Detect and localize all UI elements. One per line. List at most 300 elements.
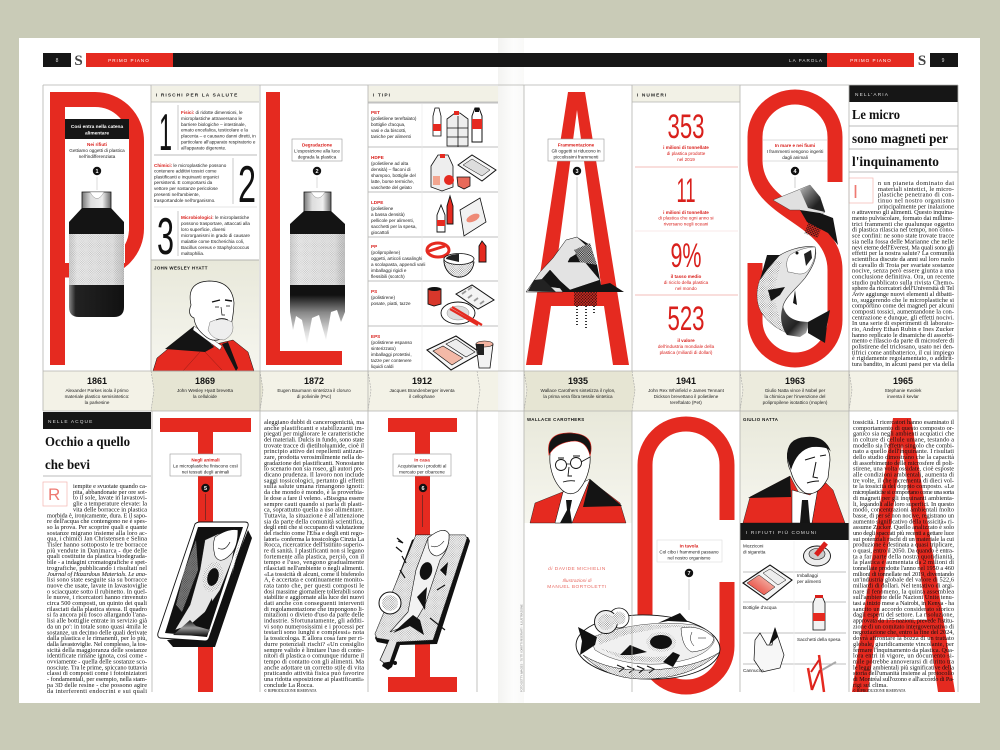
- step number 4: 4: [793, 169, 797, 175]
- article: second column: Rocca, ricercatrice dell'Istituto superio-: [264, 542, 364, 549]
- caption: degradation: L'esposizione alla luce: [294, 148, 340, 154]
- letter A with fragments: [526, 92, 629, 365]
- article: last column: globale, giuridicamente vincolante, per: [853, 641, 955, 648]
- article: last column: © RIPRODUZIONE RISERVATA: [853, 688, 906, 693]
- article: second column: sia da parte della comunità scientifica,: [264, 518, 364, 525]
- article: last column: ta a far parte della nostra quotidianità,: [853, 553, 954, 560]
- article: second column: sulla salute umana rimangono ignoti:: [264, 483, 364, 490]
- type: PET: vasi e da biscotti,: [371, 128, 406, 133]
- stat 9%: nel mondo: [675, 286, 697, 291]
- body text: quali costituite da plastica biodegrada-: [47, 553, 147, 560]
- straws: Cannucce: [743, 668, 764, 673]
- caption: sea and rivers: dagli animali: [782, 155, 808, 160]
- article: last column: te la tossicità del doppio composto. «Le: [853, 483, 954, 490]
- article: second column: anche adottare un corretto stile di vita: [264, 664, 364, 671]
- cigarette butts: [743, 543, 830, 566]
- risk 2: plastificanti e inquinanti organici: [154, 174, 219, 180]
- body text: pa 3D delle resine - che possono agire: [47, 682, 147, 689]
- body text: è rigidamente regolamentato, o addirit-: [852, 355, 954, 362]
- risk 3: Microbiologici: le microplastiche: [181, 215, 250, 220]
- 1963: la chimica per l'invenzione del: [765, 394, 825, 399]
- body text: effetti per la nostra salute? La comunità: [852, 250, 954, 257]
- article: last column: o quasi, entro il 2050. Da quando è entra-: [853, 548, 954, 554]
- article: last column: produzione è destinata a quasi triplicare,: [853, 542, 954, 549]
- step number 2: 2: [315, 169, 319, 175]
- article: second column: industrie. Sfortunatamente, gli additi-: [264, 618, 364, 625]
- body text: re dell'acqua che contengono ne è spes-: [47, 518, 147, 525]
- article: last column: sui potenziali rischi di un materiale la cui: [853, 536, 954, 543]
- body text: rilasciati dalla plastica stessa. Il quadro: [47, 606, 147, 613]
- article: last column: zione di un comitato intergovernativo di: [853, 623, 954, 630]
- type: LDPE: pellicole per alimenti,: [371, 218, 414, 223]
- portrait: John Wesley Hyatt: [151, 260, 259, 371]
- caption: at table: Col cibo i frammenti passano: [659, 550, 719, 554]
- body text: lisi sono state eseguite sia su borracce: [47, 577, 147, 584]
- article: last column: rigi sul clima.: [853, 682, 888, 689]
- article: second column: del rischio come l'Efsa e degli enti rego-: [264, 530, 364, 537]
- type: PP: PP: [371, 244, 377, 249]
- header bar: 9: [942, 58, 945, 64]
- body text: polistirene del triclosano, usato nei den-: [852, 344, 954, 350]
- body text: si fa ancora più fosco allargando l'ana-: [47, 612, 147, 619]
- panel: numbers: I NUMERI: [637, 92, 667, 98]
- 1935: la prima vera fibra tessile sintetica: [543, 394, 613, 399]
- type: LDPE: giocattoli: [371, 230, 389, 235]
- 1872: [277, 376, 351, 399]
- 1861: Alexander Parkes isola il primo: [65, 388, 129, 393]
- 1869: la celluloide: [193, 394, 217, 399]
- article: second column: mitazioni o divieto d'uso da parte delle: [264, 612, 364, 619]
- 1861: la parkesine: [85, 400, 110, 405]
- stat 353: i milioni di tonnellate: [663, 145, 709, 150]
- article: last column: tre volte, il che incrementa di dieci vol-: [853, 477, 954, 484]
- 1869: 1869: [195, 376, 215, 386]
- article: last column: uno degli spaccati più recenti a gettare luce: [853, 530, 954, 537]
- stat 353: 353: [668, 108, 704, 146]
- risk 1: all'apparato digerente.: [181, 146, 226, 150]
- article: second column: piegati per migliorare le caratteristiche: [264, 431, 364, 438]
- article: last column: mile potrebbe annoverarsi di diritto tra: [853, 658, 954, 665]
- article: second column: gradazione dei plastificanti. Nonostante: [264, 460, 364, 467]
- article: last column: microplastiche si comportano come una sorta: [853, 489, 954, 496]
- body text: Tisler hanno sottoposto le tre borracce: [47, 542, 147, 548]
- article: last column: assume Zucker. Quello analizzato è solo: [853, 524, 954, 531]
- risk 3: [157, 208, 250, 266]
- headline: sono magneti per: [852, 132, 948, 147]
- stat 523: plastica (miliardi di dollari): [660, 350, 713, 355]
- icon: fish on plate: [575, 608, 721, 681]
- article: second column: tempo di contatto con gli alimenti. Ma: [264, 658, 364, 665]
- 1872: Eugen Baumann sintetizza il cloruro: [277, 388, 351, 393]
- caption: at table: nel nostro organismo: [668, 556, 711, 560]
- article: last column: alle condizioni ambientali, aumenta di: [853, 472, 954, 479]
- headline: che bevi: [45, 458, 90, 473]
- article: last column: stirene, una volta ossidate, cioè esposte: [853, 466, 954, 473]
- article: last column: comportamento di questo composto or-: [853, 425, 954, 432]
- type: PS: posate, piatti, tazze: [371, 301, 411, 306]
- type: EPS: sinterizzato): [371, 346, 396, 351]
- article: last column: tonnellate prodotte l'anno nel 1950 a 460: [853, 565, 954, 572]
- icon: plastic fragment: [526, 237, 624, 328]
- type: EPS: (polistirene espanso: [371, 340, 413, 345]
- article: second column: re di sanità. I plastificanti non si legano: [264, 548, 364, 554]
- timeline band: [43, 371, 958, 411]
- page gutter: [498, 38, 524, 703]
- cigarette butts: di sigaretta: [743, 550, 766, 554]
- 1965: inventa il kevlar: [887, 394, 919, 399]
- section tag: [43, 412, 151, 429]
- caption: degradation: [292, 139, 342, 161]
- body text: o sciacquate sotto il rubinetto. In quel-: [47, 588, 147, 595]
- caption: food chain: Così entra nella catena: [71, 124, 123, 130]
- 1935: 1935: [568, 376, 588, 386]
- byline: di DAVIDE MICHIELIN: [548, 566, 606, 572]
- body text: o attraverso gli alimenti. Questo inquina-: [852, 209, 954, 216]
- body text: dalla plastica e le rimanenti, per lo più,: [47, 635, 147, 642]
- section tag: NELLE ACQUE: [48, 419, 93, 425]
- article: second column: vi sono numerosissimi e i processi per: [264, 623, 365, 630]
- article: last column: aumento significativo della tossicità» ri-: [853, 518, 954, 525]
- body text: circa 500 composti, un quinto dei quali: [47, 600, 147, 607]
- body text: di cavallo di Troia per svariate sostanze: [852, 262, 954, 269]
- body text: composti tossici, aumentandone la con-: [852, 308, 954, 316]
- article: second column: nitori di plastica o comunque ridurne il: [264, 653, 364, 660]
- article: last column: un'industria globale del valore di 522,6: [853, 577, 954, 584]
- body text: hanno replicato le dinamiche di assorbi-: [852, 332, 954, 339]
- headline: [43, 435, 151, 476]
- stat 9%: 9%: [670, 237, 702, 275]
- type: HDPE: [371, 154, 496, 191]
- body text: mento e rilascio da parte di microsfere di: [852, 338, 954, 345]
- caption: in animals: nei tessuti degli animali: [182, 470, 229, 474]
- portrait: John Wesley Hyatt: JOHN WESLEY HYATT: [154, 266, 208, 270]
- panel: most common waste: I RIFIUTI PIÙ COMUNI: [746, 529, 818, 536]
- body text: classi di composti come i fotoiniziatori: [47, 670, 147, 677]
- body text: pita, abbandonate per ore sot-: [73, 489, 147, 496]
- type: PP: [371, 241, 486, 279]
- article: second column: una ridotta esposizione ai plastificanti»: [264, 676, 364, 683]
- header bar: PRIMO PIANO: [850, 58, 892, 63]
- drop cap: R: [48, 485, 60, 504]
- panel: plastic types: I TIPI: [373, 92, 391, 98]
- icon: fish: [757, 247, 830, 343]
- article: last column: dagli esperti del settore. La risoluzione,: [853, 612, 954, 619]
- body text: nuove che usate, lavate in lavastoviglie: [47, 582, 147, 590]
- column rules: [43, 85, 958, 692]
- body text: più vendute in Danimarca - due delle: [47, 547, 147, 554]
- article: Le micro: [849, 85, 958, 368]
- article: second column: la tossicologa. E allora cosa fare per ri-: [264, 635, 364, 642]
- body text: da un po': in totale sono quasi 4mila le: [47, 623, 147, 630]
- article: last column: li, legandoli alle loro superfici. In questo: [853, 501, 954, 508]
- header bar: PRIMO PIANO: [108, 58, 150, 63]
- body text: studio pubblicato sulla rivista Chemo-: [852, 279, 954, 286]
- stat 11: i milioni di tonnellate: [663, 210, 709, 215]
- letter L with decaying bottle: [266, 92, 345, 365]
- caption: fragmentation: [548, 139, 604, 161]
- step number 2: [313, 167, 321, 175]
- caption: sea and rivers: I frammenti vengono ingeriti: [767, 149, 823, 154]
- letter P with bottle: [50, 92, 137, 365]
- article: last column: negoziazione che, entro la fine del 2024,: [853, 629, 954, 636]
- caption: in animals: Le microplastiche finiscono così: [173, 464, 238, 468]
- step number 4: [791, 167, 799, 175]
- risk 2: Chimici: le microplastiche possono: [154, 163, 227, 168]
- step number 6: 6: [421, 486, 425, 492]
- food packaging: [743, 565, 821, 600]
- header bar: 8: [56, 58, 59, 64]
- type: HDPE: shampoo, bottiglie del: [371, 173, 416, 178]
- step number 5: [201, 484, 210, 492]
- article: last column: lora entri in vigore, un documento si-: [853, 653, 954, 660]
- panel: plastic types: [368, 86, 498, 370]
- stat 353: nel 2019: [677, 157, 695, 162]
- type: LDPE: LDPE: [371, 200, 383, 205]
- drop cap: I: [853, 182, 858, 202]
- body text: dalla lavastoviglie. Nel complesso, la tos-: [47, 641, 147, 648]
- 1912: [389, 376, 455, 399]
- byline: Illustrazioni di: [562, 578, 592, 584]
- stat 523: il valore: [677, 338, 695, 343]
- article: last column: tasi a inizio mese a Nairobi, in Kenya - ha: [853, 600, 954, 607]
- type: HDPE: HDPE: [371, 155, 384, 160]
- 1963: polipropilene isotattico (moplen): [763, 400, 828, 405]
- body text: tifrici come antibatterico, il cui impiego: [852, 349, 954, 356]
- food packaging: per alimenti: [797, 579, 821, 584]
- step number 5: 5: [204, 486, 207, 492]
- byline: MANUEL BORTOLETTI: [547, 584, 607, 590]
- body text: morbida è, ironicamente, dura. E il sapo-: [47, 512, 147, 519]
- article: second column: degli enti che si occupano di valutazione: [264, 524, 364, 531]
- section tag: [849, 85, 958, 102]
- body text: In una serie di esperimenti di laborato-: [852, 320, 954, 327]
- letter I with cutting board: [375, 418, 470, 692]
- shopping bags: Sacchetti della spesa: [797, 637, 841, 642]
- body text: centrazione e dunque, gli effetti nocivi.: [852, 314, 954, 321]
- body text: tura bandito, in alcuni paesi per via della: [852, 361, 954, 368]
- body text: [47, 483, 147, 695]
- straws: [743, 655, 836, 692]
- header bar: S: [918, 53, 926, 69]
- body text: [852, 180, 955, 368]
- type: PET: bottiglie d'acqua,: [371, 122, 405, 127]
- type: PS: PS: [371, 289, 377, 294]
- icon: fish fragment: [773, 185, 838, 245]
- 1941: Dickson brevettano il polietilene: [654, 394, 719, 399]
- article: second column: [264, 419, 365, 693]
- water bottles: [743, 595, 825, 630]
- cigarette butts: Mozziconi: [743, 544, 763, 548]
- body text: sia nella fossa delle Marianne che nelle: [852, 238, 954, 245]
- big red letter A behind last column: [852, 418, 955, 692]
- type: PET: [371, 108, 482, 147]
- risk 2: contenere additivi tossici come: [154, 168, 217, 174]
- risk 3: malattie come Escherichia coli,: [181, 239, 244, 244]
- caption: sea and rivers: [763, 140, 827, 161]
- risk 2: [154, 156, 256, 214]
- body text: trografiche, pubblicando i risultati nel: [47, 565, 147, 572]
- body text: comportino come dei magneti per alcuni: [852, 303, 954, 310]
- 1965: Stephanie Kwolek: [885, 388, 922, 393]
- body text: sostanze migrano insieme alla loro ac-: [47, 530, 147, 537]
- risk 1: Fisici: di ridotte dimensioni, le: [181, 110, 243, 115]
- caption: food chain: [65, 119, 129, 161]
- section tag: NELL'ARIA: [855, 92, 889, 98]
- article: second column: conclude La Rocca.: [264, 682, 314, 689]
- article: last column: dovrà affrontare la bozza di un trattato: [853, 635, 954, 642]
- risk 1: 1: [159, 104, 172, 162]
- portrait: Wallace Carothers: WALLACE CAROTHERS: [527, 417, 585, 422]
- headline: Occhio a quello: [45, 435, 130, 450]
- article: last column: nare il fenomeno, la quinta assemblea: [853, 588, 954, 595]
- type: LDPE: [371, 196, 486, 236]
- icon: degrading bottle: [290, 192, 345, 345]
- body text: n un pianeta dominato dai: [878, 180, 954, 187]
- byline: [547, 566, 607, 590]
- 1935: [541, 376, 615, 399]
- 1861: 1861: [87, 376, 107, 386]
- body text: Aviv aggiunge nuovi elementi al dibatti-: [852, 291, 954, 298]
- stat 11: riversano negli oceani: [664, 222, 708, 226]
- body text: Journal of Hazardous Materials. Le ana-: [47, 571, 147, 578]
- caption: food chain: nell'indifferenziata: [79, 154, 116, 159]
- article: second column: latori» conferma la tossicologa Cinzia La: [264, 536, 364, 543]
- stat 9%: il tasso medio: [671, 274, 702, 279]
- type: PS: (polistirene): [371, 295, 395, 300]
- headline: l'inquinamento: [852, 155, 939, 170]
- body text: nevi eterne dell'Everest. Ma quali sono gli: [852, 244, 954, 251]
- 1965: [885, 376, 922, 399]
- body text: tinuo nel nostro organismo: [878, 198, 954, 204]
- article: second column: tempo e l'uso, vengono gradualmente: [264, 559, 364, 566]
- body text: vita delle borracce in plastica: [73, 506, 147, 513]
- caption: sea and rivers: In mare e nei fiumi: [775, 143, 815, 148]
- 1935: Wallace Carothers sintetizza il nylon,: [541, 388, 615, 393]
- article: second column: dati anche con conseguenti interventi: [264, 600, 364, 607]
- caption: degradation: Degradazione: [302, 142, 333, 148]
- article: second column: testarli sono lunghi e complessi» nota: [264, 629, 364, 636]
- caption: at table: [657, 540, 722, 562]
- article: second column: fortemente alla plastica, perciò, con il: [264, 553, 364, 560]
- risk 2: vettore per sostanze pericolose: [154, 186, 218, 191]
- body text: ovviamente - quella delle sostanze sco-: [47, 658, 147, 666]
- step number 3: 3: [575, 169, 579, 175]
- article: second column: anche plastificanti e stabilizzanti im-: [264, 425, 364, 432]
- type: EPS: tazze per contenere: [371, 358, 412, 363]
- type: HDPE: densità) – flaconi di: [371, 167, 411, 172]
- drop cap: [43, 482, 67, 506]
- article: second column: rilasciati nell'ambiente o negli alimenti.: [264, 565, 364, 572]
- article: second column: zare, prodotta verosimilmente nella de-: [264, 454, 364, 461]
- stat 523: dell'industria mondiale della: [658, 344, 715, 349]
- 1963: [763, 376, 828, 405]
- article: second column: sempre cauti quando si parla di plasti-: [264, 501, 364, 508]
- type: HDPE: (polietilene ad alta: [371, 161, 409, 166]
- stat 11: 11: [676, 172, 696, 210]
- article: second column: lo scenario non sia roseo, gli autori pre-: [264, 466, 364, 473]
- article: last column: le leggi ambientali più significative della: [853, 664, 954, 671]
- article: last column: [853, 419, 955, 693]
- article: second column: stabilite e aggiornate alla luce dei nuovi: [264, 594, 364, 601]
- 1861: materiale plastico semisintetico:: [65, 394, 129, 399]
- risk 1: placenta – e causano danni diretti, in: [181, 134, 256, 138]
- article: second column: dei materiali. Dulcis in fundo, sono state: [264, 436, 364, 444]
- type: HDPE: vaschette del gelato: [371, 185, 412, 190]
- body text: iempite e svuotate quando ca-: [73, 483, 147, 490]
- body text: conclusione definitiva. Ora, un recente: [852, 274, 954, 280]
- panel: most common waste: [740, 523, 849, 692]
- 1963: Giulio Natta vince il Nobel per: [765, 388, 826, 393]
- portrait: Giulio Natta: [740, 411, 849, 523]
- caption: fragmentation: Gli oggetti si riducono in: [551, 148, 601, 154]
- article: second column: rata tanto che, per questi composti le: [264, 582, 364, 590]
- article: last column: modello sia l'effetto singolo che combi-: [853, 442, 954, 449]
- body text: da interferenti endocrini e sui quali: [47, 688, 147, 695]
- type: LDPE: (polietilene: [371, 206, 394, 211]
- article: last column: miliardi di dollari. Nel tentativo di argi-: [853, 582, 954, 590]
- risk 3: microrganismi in grado di causare: [181, 233, 250, 238]
- type: EPS: imballaggi protettivi,: [371, 352, 412, 357]
- article: last column: milioni di tonnellate nel 2019, diventando: [853, 571, 954, 578]
- body text: to, suggerendo che le microplastiche si: [852, 297, 954, 304]
- caption: in animals: Negli animali: [191, 458, 220, 462]
- body text: di plastica rilascia nel tempo, non cono-: [852, 227, 954, 234]
- type: HDPE: latte, borse termiche,: [371, 179, 414, 184]
- body text: glie a temperature elevate: la: [73, 501, 147, 508]
- letter S with fish: [755, 97, 838, 360]
- article: last column: modo, concentrazioni ambientali molto: [853, 507, 954, 514]
- body text: materiali sintetici, le micro-: [878, 186, 954, 193]
- article: last column: tossicità. I ricercatori hanno esaminato il: [853, 419, 954, 426]
- body text: bile - a indagini cromatografiche e spet-: [47, 559, 147, 566]
- stat 9%: [664, 237, 709, 291]
- stat 11: [658, 172, 714, 226]
- header bar: S: [74, 53, 83, 69]
- type: EPS: EPS: [371, 334, 380, 339]
- step number 3: [573, 167, 581, 175]
- risk 1: emato encefalica, testicolare e la: [181, 128, 248, 132]
- type: PET: PET: [371, 110, 380, 115]
- step number 6: [419, 484, 427, 492]
- risk 1: particolare all'apparato respiratorio e: [181, 140, 256, 144]
- photo credit: FOTO GETTY IMAGES · TUTTI I DIRITTI RISERVATI · ILLUSTRAZIONE: [520, 604, 524, 692]
- stat 9%: di riciclo della plastica: [664, 280, 709, 285]
- article: last column: di assorbimento delle microsfere di poli-: [853, 460, 954, 467]
- risk 1: microplastiche attraversano le: [181, 116, 242, 121]
- body text: nosciute. Tra le prime, spiccano tuttavia: [47, 664, 147, 671]
- step number 7: 7: [687, 571, 691, 577]
- caption: at table shopping: Acquistiamo i prodotti al: [398, 464, 446, 468]
- caption: food chain: Gettiamo oggetti di plastica: [69, 148, 125, 153]
- article: second column: trovate tracce di dietiltoluamide, cioè il: [264, 442, 364, 449]
- body text: sicità della maggioranza delle sostanze: [47, 647, 147, 654]
- headline: Le micro: [852, 108, 900, 123]
- article: second column: A, è accertata e continuamente monito-: [264, 577, 364, 584]
- caption: fragmentation: Frammentazione: [558, 142, 595, 148]
- caption: degradation: degrada la plastica: [298, 154, 337, 160]
- body text: so la prova. Per scoprire quali e quante: [47, 524, 147, 531]
- panel: numbers: [632, 86, 740, 355]
- article: last column: basse, di per sé non nocive, registrano un: [853, 512, 955, 519]
- step number 1: [93, 167, 101, 175]
- water bottles: Bottiglie d'acqua: [743, 605, 777, 610]
- panel: health risks: [151, 86, 259, 266]
- body text: to il sole, lavate in lavastovi-: [73, 495, 147, 502]
- article: last column: in colture di cellule umane, testando a: [853, 436, 954, 444]
- panel: health risks: I RISCHI PER LA SALUTE: [156, 92, 238, 98]
- type: EPS: [371, 334, 493, 370]
- letter T with tray fish: [158, 418, 252, 692]
